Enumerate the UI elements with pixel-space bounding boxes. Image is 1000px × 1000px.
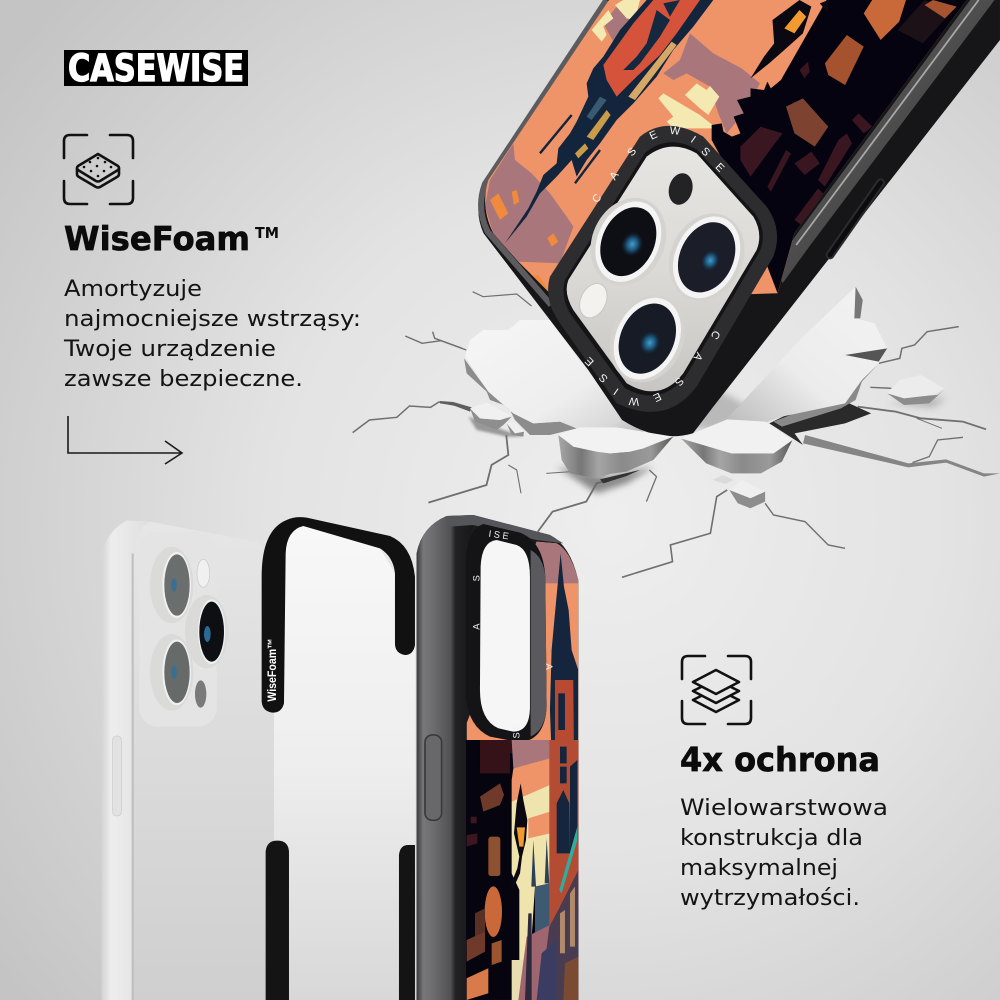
fragment side wall — [558, 435, 673, 478]
shadow: rocks — [468, 417, 523, 437]
foam rails — [262, 517, 415, 1000]
ring lettering: I S E — [488, 529, 509, 541]
ring lettering: S — [625, 145, 639, 159]
lens 1 — [577, 185, 680, 298]
spires — [531, 838, 549, 887]
side button — [425, 735, 442, 820]
arrow — [68, 416, 182, 464]
ring lettering: S — [597, 371, 611, 385]
lens right — [198, 599, 225, 664]
flash — [574, 279, 612, 322]
mauve lower — [518, 925, 550, 1000]
ring lettering: W — [669, 125, 681, 138]
rock: left — [470, 403, 512, 430]
ring lettering: I — [612, 385, 621, 397]
logo: CASEWISE: CASEWISE — [68, 47, 244, 90]
flash — [197, 559, 210, 587]
sky — [512, 740, 550, 768]
teal streak — [559, 827, 577, 893]
text block: WiseFoam description — [63, 276, 361, 392]
left rim highlight — [481, 0, 607, 305]
ring lettering: A — [471, 623, 481, 630]
lamp — [511, 783, 527, 888]
fragment top surface — [558, 427, 673, 453]
fragments: left — [440, 320, 647, 437]
mauve sky blocks — [485, 7, 760, 263]
sensor — [195, 680, 206, 708]
text block: protection description: konstrukcja dla — [680, 825, 863, 851]
fragment: centre right — [681, 419, 792, 473]
lens bottom — [162, 639, 191, 705]
dark gap: right — [769, 403, 871, 445]
shop signs — [786, 0, 957, 147]
text block: protection description: maksymalnej — [680, 855, 838, 881]
side wall — [417, 516, 473, 1000]
text block: WiseFoam description: najmocniejsze wstrząsy: — [64, 306, 361, 332]
lens 2 — [655, 201, 758, 314]
crack fragments: front right — [681, 419, 792, 508]
ring lettering: S — [698, 145, 712, 159]
shop signs — [480, 783, 504, 812]
dark red bricks — [740, 62, 872, 225]
text block: WiseFoam description: zawsze bezpieczne. — [64, 366, 303, 392]
heading: WiseFoam: TM — [255, 224, 279, 242]
cream sky blocks — [592, 0, 719, 128]
cream sky — [512, 785, 550, 960]
dark building — [712, 0, 967, 293]
text block: WiseFoam description: Amortyzuje — [64, 276, 202, 302]
street perspective — [540, 870, 578, 1000]
side glossy band — [774, 0, 995, 283]
text block: WiseFoam description: Twoje urządzenie — [63, 336, 276, 362]
side button — [113, 736, 121, 816]
button — [830, 183, 881, 255]
text block: protection description: Wielowarstwowa — [680, 795, 888, 821]
lens top — [162, 552, 191, 618]
camera plateau — [139, 532, 217, 727]
ring lettering: W I S E — [511, 723, 521, 755]
icon: foam pad in focus frame — [64, 135, 133, 204]
ring lettering: S — [672, 375, 686, 388]
phone: falling case, top — [460, 0, 1000, 436]
top bevel — [447, 515, 563, 543]
crack: dark gap under fragment — [600, 470, 640, 483]
rock: right — [887, 375, 944, 405]
ring lettering: W — [628, 394, 640, 407]
tower — [550, 553, 578, 757]
label: WiseFoam on rail: WiseFoam™ — [265, 638, 279, 702]
phone: patterned case side view — [417, 515, 580, 1000]
side frame — [102, 521, 150, 1000]
ring lettering — [583, 125, 726, 407]
ring lettering: E — [648, 129, 659, 143]
orange pixels — [490, 190, 558, 295]
soft shadows under fragments — [601, 390, 946, 430]
text block: protection description: wytrzymałości. — [680, 885, 860, 911]
clear inner panel — [274, 525, 415, 1000]
slab: left top surface — [465, 320, 647, 433]
street lamp — [751, 0, 828, 78]
tower — [505, 0, 713, 243]
crack wedge: left rock — [440, 401, 472, 412]
case body — [478, 0, 1000, 436]
rock: left small — [507, 422, 524, 437]
icon: layers in focus frame — [682, 656, 751, 724]
heading: 4x ochrona: 4x ochrona — [680, 740, 880, 779]
camera ring inner shade — [563, 142, 763, 395]
shadow: fragment — [557, 467, 653, 493]
dark bricks — [480, 740, 517, 773]
ring lettering: I — [688, 134, 698, 146]
frame edge — [132, 553, 134, 1000]
cream lower — [512, 960, 525, 1000]
microphone — [665, 171, 696, 207]
phone artwork — [485, 0, 966, 294]
crack wedge: right — [803, 435, 1000, 477]
fragment: centre left — [557, 427, 673, 493]
ring lettering: E — [713, 161, 726, 175]
camera ring — [466, 524, 547, 742]
lens 3 — [596, 282, 699, 395]
cracked wall — [353, 287, 1000, 577]
slab: right — [727, 287, 887, 427]
blue building — [535, 883, 550, 937]
ring lettering: A — [544, 664, 554, 671]
lens rims — [150, 547, 228, 711]
text block: protection description — [680, 795, 888, 911]
ring lettering: E — [583, 354, 597, 368]
tower column — [549, 740, 578, 927]
ring lettering: C — [590, 192, 604, 205]
camera plateau — [567, 147, 759, 391]
ring lettering — [471, 529, 554, 755]
camera ring — [548, 126, 777, 412]
ring lettering: E — [651, 390, 663, 404]
ring lettering: S — [471, 575, 481, 581]
cracks — [353, 292, 986, 577]
side band highlight — [796, 0, 979, 245]
case artwork: below camera — [466, 740, 578, 1000]
heading: WiseFoam: WiseFoam — [64, 219, 250, 258]
case artwork — [467, 540, 580, 1000]
ring lettering: A — [690, 350, 705, 363]
ring lettering: A — [608, 169, 622, 182]
phone: white iPhone back — [102, 521, 274, 1000]
slab: left side wall — [464, 358, 577, 435]
small rocks: bottom — [712, 475, 765, 508]
ring lettering: C — [708, 328, 722, 341]
